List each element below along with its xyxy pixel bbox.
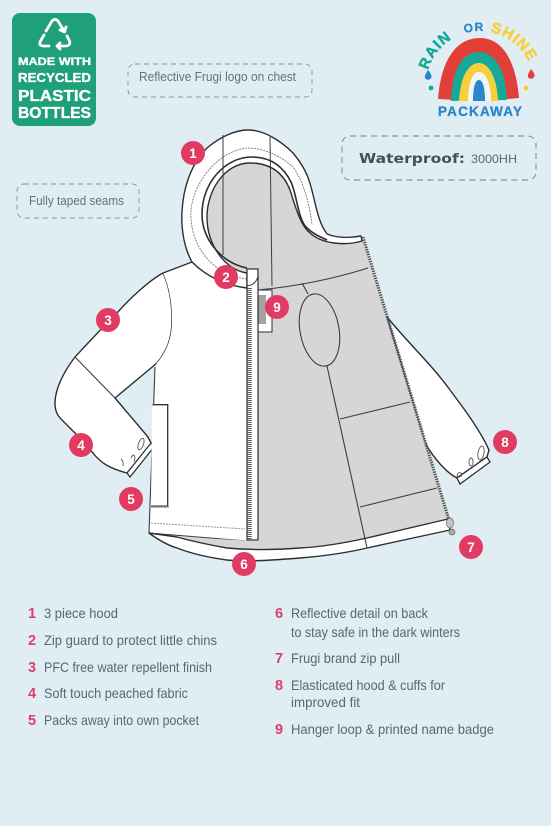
badge: made with recycled plastic bottles: PLASTIC	[18, 88, 91, 105]
marker 3: 3	[104, 313, 112, 328]
hanger loop and name badge	[258, 290, 272, 332]
reflective hem band	[149, 519, 450, 561]
callout: fully taped seams: Fully taped seams	[29, 194, 124, 208]
feature list: right column: Frugi brand zip pull	[291, 650, 400, 666]
marker 7: 7	[467, 540, 475, 555]
logo: rain or shine packaway rainbow: PACKAWAY	[438, 104, 522, 119]
marker 6	[232, 552, 256, 576]
numbered markers	[69, 141, 517, 576]
badge: made with recycled plastic bottles: MADE WITH	[18, 56, 91, 68]
feature list: right column	[275, 605, 494, 738]
badge: made with recycled plastic bottles: RECYCLED	[18, 70, 91, 85]
marker 1	[181, 141, 205, 165]
callout: reflective logo	[128, 64, 312, 97]
marker 9: 9	[273, 300, 281, 315]
badge: made with recycled plastic bottles: BOTTLES	[18, 105, 91, 122]
jacket grey lining	[177, 163, 449, 550]
feature list: left column: Zip guard to protect little chins	[44, 632, 217, 648]
feature list: left column: 1	[28, 606, 36, 622]
feature list: left column: 5	[28, 713, 36, 729]
feature list: left column: 4	[28, 686, 36, 702]
marker 2: 2	[222, 270, 230, 285]
marker 8	[493, 430, 517, 454]
feature list: right column: Elasticated hood & cuffs for	[291, 677, 445, 693]
icon: recycling arrows	[40, 20, 70, 49]
marker 7	[459, 535, 483, 559]
marker 9	[265, 295, 289, 319]
right sleeve	[387, 317, 490, 484]
hem stitch line	[151, 523, 245, 529]
marker 5	[119, 487, 143, 511]
hood	[182, 130, 362, 288]
feature list: right column: 9	[275, 722, 283, 738]
feature list: left column: 3 piece hood	[44, 605, 118, 621]
logo: rain or shine packaway rainbow: RAIN	[418, 31, 451, 70]
feature list: left column: Soft touch peached fabric	[44, 685, 188, 701]
feature list: right column: improved fit	[291, 694, 360, 710]
marker 8: 8	[501, 435, 509, 450]
feature list: right column: 7	[275, 651, 283, 667]
feature list: left column: 3	[28, 660, 36, 676]
left sleeve	[55, 273, 172, 477]
feature list: right column: 6	[275, 606, 283, 622]
marker 3	[96, 308, 120, 332]
jacket technical drawing	[55, 130, 490, 561]
marker 2	[214, 265, 238, 289]
feature list: left column	[28, 605, 217, 729]
callout: reflective logo: Reflective Frugi logo on chest	[139, 70, 296, 84]
callout: fully taped seams	[17, 184, 139, 218]
feature list: left column: 2	[28, 633, 36, 649]
feature list: right column: 8	[275, 678, 283, 694]
feature list: right column: Reflective detail on back	[291, 605, 429, 621]
callout: waterproof rating	[342, 136, 536, 180]
logo: rain or shine packaway rainbow: OR	[464, 22, 484, 32]
feature list: left column: Packs away into own pocket	[44, 712, 199, 728]
right zip with zip pull	[363, 237, 455, 535]
marker 4: 4	[77, 438, 85, 453]
marker 1: 1	[189, 146, 197, 161]
marker 5: 5	[127, 492, 135, 507]
lining seams and inner pocket	[258, 268, 437, 548]
badge: made with recycled plastic bottles	[12, 13, 96, 126]
marker 4	[69, 433, 93, 457]
zip guard and front zip	[247, 269, 258, 540]
pocket	[151, 404, 168, 507]
feature list: right column: Hanger loop & printed name badge	[291, 721, 494, 737]
jacket front panel	[149, 262, 247, 541]
marker 6: 6	[240, 557, 248, 572]
logo: rain or shine packaway rainbow	[418, 22, 538, 119]
callout: waterproof rating: 3000HH	[471, 152, 517, 166]
callout: waterproof rating: Waterproof:	[359, 151, 465, 167]
feature list: left column: PFC free water repellent finish	[44, 659, 212, 675]
logo: rain or shine packaway rainbow: SHINE	[491, 22, 538, 62]
feature list: right column: to stay safe in the dark winters	[291, 624, 460, 640]
